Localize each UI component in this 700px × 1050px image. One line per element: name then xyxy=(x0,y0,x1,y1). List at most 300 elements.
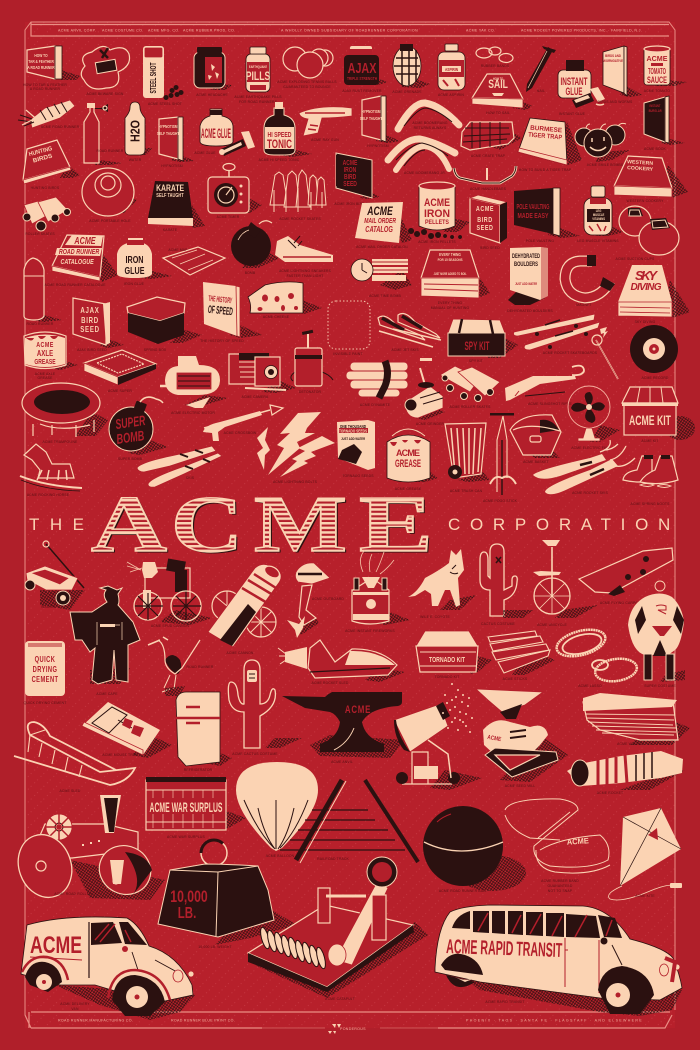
icon: iron bird seed dark book: ACME xyxy=(343,159,357,167)
icon: how to sail book xyxy=(472,74,532,115)
icon: skateboards: ACME ROCKET SKATEBOARDS xyxy=(543,351,598,355)
icon: mail order catalog: ACME xyxy=(366,206,394,218)
icon: jar xyxy=(194,47,232,97)
icon: H2O xyxy=(125,102,152,162)
icon: book how to tar and feather: HOW TO TAR & FEATHER xyxy=(23,83,67,87)
icon: iron bird seed dark book xyxy=(334,153,380,206)
icon: iron pellets can xyxy=(408,182,470,244)
icon: cactus xyxy=(480,544,533,626)
icon: tomato sauce can: ACME TOMATO xyxy=(644,89,670,93)
icon: ray gun xyxy=(299,107,352,142)
logo: Ponderous: PONDEROUS xyxy=(340,1027,366,1031)
icon: spy kit crate xyxy=(448,319,518,363)
icon: mouse trap xyxy=(82,702,172,758)
icon: spy kit crate: SPY KIT xyxy=(469,359,483,363)
icon: western cookery book xyxy=(614,156,688,203)
icon: sneakers xyxy=(275,236,333,278)
icon: ray gun: ACME RAY GUN xyxy=(311,138,339,142)
icon: basket tub: ACME BASKET xyxy=(523,460,549,464)
icon: one-thousand seeds box: ONE THOUSAND xyxy=(340,423,366,429)
icon: rocking horse xyxy=(20,444,82,497)
icon: fountain canister xyxy=(345,550,410,633)
footer text xyxy=(58,1018,642,1022)
icon: brush xyxy=(18,100,80,129)
icon: dehydrated boulders: JUST ADD WATER xyxy=(515,282,538,286)
icon: ribbon band: ACME RUBBER BAND xyxy=(541,879,579,883)
icon: ajax jar xyxy=(342,46,388,93)
icon: ajax jar: AJAX RUST REMOVER xyxy=(342,89,382,93)
icon: hypnotism book: SELF TAUGHT xyxy=(157,130,180,136)
title shadow: M xyxy=(256,482,349,570)
icon: nail xyxy=(526,46,556,93)
icon: tomato sauce can: ACME xyxy=(646,54,668,63)
icon: black ball xyxy=(423,806,526,893)
title word: ACME: A xyxy=(91,481,167,569)
header text: ACME ROCKET POWERED PRODUCTS, INC. · FAIRFIELD, N.J. xyxy=(521,28,642,32)
icon: axle grease xyxy=(24,332,78,380)
icon: book birds and...: BIRDS AND WORMS xyxy=(598,100,633,104)
icon: round bomb xyxy=(231,221,280,275)
icon: history of speed book: THE HISTORY xyxy=(208,294,233,305)
icon: railroad tracks: RAILROAD TRACK xyxy=(317,857,349,861)
icon: spring boots: ACME SPRING BOOTS xyxy=(630,502,670,506)
icon: dog sled: ACME SLED xyxy=(60,789,81,793)
icon: one-thousand seeds box: JUST ADD WATER xyxy=(341,437,366,441)
title word: ACME xyxy=(91,481,433,569)
icon: meat grinder xyxy=(405,358,445,426)
icon: cement bag: CEMENT xyxy=(32,676,59,684)
icon: lightning bolts: ACME LIGHTNING BOLTS xyxy=(273,480,318,484)
icon: boomerang 2: ACME BOOMERANG JR. xyxy=(404,171,446,175)
icon: electric motor xyxy=(160,356,228,415)
icon: road runner catalogue: CATALOGUE xyxy=(60,258,94,266)
icon: pole vaulting book: POLE VAULTING xyxy=(526,239,554,243)
icon: iron bird seed dark book: ACME IRON BIRD SEED xyxy=(334,202,376,206)
icon: tall tank: ROAD RUNNER xyxy=(27,322,54,326)
icon: rocket engine xyxy=(567,751,685,795)
footer text: ROAD RUNNER BLUE PRINT CO. xyxy=(171,1018,235,1022)
icon: wagon: WAGON xyxy=(41,605,55,609)
icon: one-thousand seeds box: TORNADO SEEDS xyxy=(339,428,367,434)
icon: iron bird seed dark book: IRON xyxy=(344,166,356,174)
icon: plunger detonator xyxy=(291,330,333,394)
icon: book how to tar and feather xyxy=(23,46,80,91)
icon: rope loops: ACME LASSO xyxy=(578,684,602,688)
icon: tornado kit crate: TORNADO KIT xyxy=(429,657,466,664)
icon: small rings xyxy=(476,47,513,68)
icon: super bomb xyxy=(109,397,168,461)
header text: ACME RUBBER PROD. CO. xyxy=(183,28,235,32)
icon: pogo stick: ACME POGO STICK xyxy=(483,499,518,503)
icon: aspirin bottle: ASPIRIN xyxy=(445,66,458,72)
icon: carpet: ACME FLYING CARPET xyxy=(600,601,640,605)
icon: sky diving book: DIVING xyxy=(630,282,662,293)
icon: skateboards xyxy=(514,314,600,355)
icon: small rings: RUBBER BANDS xyxy=(481,64,510,68)
icon: trash can: ACME TRASH CAN xyxy=(450,489,483,493)
icon: dynamite bundle xyxy=(346,361,408,407)
icon: pogo stick xyxy=(483,413,518,503)
title xyxy=(29,481,680,570)
icon: suction weights xyxy=(616,206,679,261)
icon: instant glue: INSTANT xyxy=(560,76,588,88)
icon: hunting birds book: HUNTING BIRDS xyxy=(31,186,60,190)
icon: book hypnotism 2: HYPNOTISM xyxy=(361,108,381,114)
icon: H2O: WATER xyxy=(129,158,142,162)
icon: refrigerator xyxy=(176,692,232,772)
icon: nail: NAIL xyxy=(537,89,545,93)
icon: karate book xyxy=(148,181,205,232)
icon: pole vaulting book xyxy=(514,188,580,243)
icon: skis pair xyxy=(137,446,222,487)
icon: rifle xyxy=(505,366,584,406)
icon: axle grease: GREASE xyxy=(37,376,53,380)
header text: ACME MFG. CO. xyxy=(148,28,180,32)
icon: rockets row xyxy=(270,170,326,221)
icon: railroad tracks xyxy=(280,780,418,863)
icon: earthquake pills: PILLS xyxy=(246,71,270,83)
icon: book how to tar and feather: A ROAD RUNNER xyxy=(27,64,55,70)
icon: trampoline: ACME TRAMPOLINE xyxy=(43,440,78,444)
icon: dark box xyxy=(127,297,202,352)
icon: seed mill: ACME SEED MILL xyxy=(505,784,535,788)
icon: burmese tiger trap book: HOW TO BUILD A TIGER TRAP xyxy=(519,168,572,172)
icon: axle grease: AXLE xyxy=(37,348,53,358)
icon: beware blob: ACME BEWARE SIGN xyxy=(87,92,124,96)
title shadow: A xyxy=(93,482,169,570)
icon: tennis balls xyxy=(277,47,337,89)
icon: logs bundle: ACME STICKS xyxy=(503,677,528,681)
icon: tall tank xyxy=(24,258,62,326)
icon: dynamite bundle: ACME DYNAMITE xyxy=(360,403,391,407)
icon: dehydrated boulders xyxy=(507,247,553,313)
icon: iron glue: IRON xyxy=(126,254,143,265)
icon: aspirin bottle xyxy=(438,44,465,97)
header text xyxy=(58,28,642,32)
icon: lightning bolts xyxy=(257,412,335,484)
icon: leg muscle vitamins: VITAMINS xyxy=(592,217,606,221)
icon: war surplus crate: ACME WAR SURPLUS xyxy=(167,835,206,839)
icon: ajax bird seed xyxy=(73,298,124,352)
icon: mail order catalog: CATALOG xyxy=(365,226,393,234)
icon: acme delivery van: ACME xyxy=(30,932,82,959)
icon: dehydrated boulders: DEHYDRATED xyxy=(512,253,540,260)
icon: acme grease can xyxy=(387,429,438,491)
icon: dark book: ACME BOOK xyxy=(644,147,667,151)
icon: kite xyxy=(608,808,682,900)
icon: cement bag: DRYING xyxy=(33,666,57,674)
icon: pole vaulting book: MADE EASY xyxy=(518,211,548,220)
icon: leg muscle vitamins: LEG MUSCLE VITAMINS xyxy=(577,239,619,243)
icon: cement bag xyxy=(24,641,66,705)
icon: superhero costume xyxy=(628,581,685,688)
icon: shoes skis: ACME JET SKIS xyxy=(391,348,419,352)
icon: acme delivery van: VAN xyxy=(71,1007,79,1011)
icon: rockets row: ACME ROCKET SKATES xyxy=(279,217,321,221)
icon: bird seed box: BIRD SEED xyxy=(480,246,500,250)
icon: outboard motor xyxy=(287,563,344,638)
icon: caped villain xyxy=(70,586,140,696)
icon: hi speed tonic: TONIC xyxy=(267,137,292,151)
icon: roller skates xyxy=(23,197,70,236)
icon: hypnotism book: HYPNOTISM xyxy=(161,164,183,168)
icon: one-thousand seeds box xyxy=(337,420,375,478)
icon: basket tub xyxy=(510,415,561,464)
icon: how to sail book: HOW TO SAIL xyxy=(486,111,510,115)
icon: earthquake pills xyxy=(234,47,282,104)
icon: jar: ACME HEADACHE xyxy=(196,93,228,97)
icon: vinyl record xyxy=(630,325,678,380)
icon: handlebar xyxy=(454,166,516,191)
icon: karate book: KARATE xyxy=(156,183,184,193)
header text: ACME ANVIL CORP. xyxy=(58,28,96,32)
icon: radio timer: ACME TIMER xyxy=(217,215,240,219)
artwork: upper catalogue xyxy=(18,44,695,506)
icon: spy kit crate: SPY KIT xyxy=(464,339,490,353)
icon: sky diving book: SKY DIVING xyxy=(635,320,656,324)
icon: kite: ACME KITE xyxy=(635,894,655,898)
icon: acme delivery van xyxy=(21,917,195,1020)
icon: burmese tiger trap book xyxy=(518,118,582,172)
icon: camera: ACME CAMERA xyxy=(242,395,269,399)
icon: rifle: ACME SLINGSHOT RIFLE xyxy=(528,402,572,406)
icon: tomato sauce can: TOMATO xyxy=(648,67,666,76)
icon: dotted invisible box: INVISIBLE PAINT xyxy=(333,352,363,356)
icon: 10,000 lb weight: 10,000 xyxy=(170,888,208,907)
icon: ajax jar: TRIPLE STRENGTH xyxy=(347,75,377,81)
icon: leg muscle vitamins: LEG xyxy=(596,209,602,213)
icon: ajax bird seed: AJAX xyxy=(80,305,100,315)
icon: acme delivery van: ACME DELIVERY xyxy=(60,1002,90,1006)
icon: cheese xyxy=(248,282,322,319)
icon: western cookery book: WESTERN COOKERY xyxy=(626,199,664,203)
icon: catapult xyxy=(248,857,428,1001)
icon: dark box: SPRING BOX xyxy=(144,348,167,352)
icon: alarm clock and dynamite: ACME TIME BOMB xyxy=(369,294,401,298)
icon: war surplus crate: ACME WAR SURPLUS xyxy=(150,799,222,815)
icon: rocket boat xyxy=(278,640,405,685)
icon: book birds and...: WORMGATIVE xyxy=(603,59,624,63)
icon: dehydrated boulders: DEHYDRATED BOULDERS xyxy=(507,309,553,313)
icon: book hypnotism 2 xyxy=(360,96,400,148)
icon: cement bag: QUICK xyxy=(35,656,55,664)
icon: everything book xyxy=(421,250,490,310)
icon: burmese tiger trap book: BURMESE xyxy=(530,125,563,134)
icon: dog sled xyxy=(14,722,135,793)
icon: ribbon band: NOT TO SNAP xyxy=(548,889,573,893)
icon: unicycle: ACME UNICYCLE xyxy=(537,623,567,627)
icon: earthquake pills: EARTHQUAKE xyxy=(249,65,267,69)
title word: THE: THE xyxy=(29,515,94,534)
icon: book birds and...: BIRDS AND xyxy=(605,54,621,58)
icon: glue tube xyxy=(572,87,605,108)
icon: H2O: H2O xyxy=(128,120,142,142)
icon: instant glue xyxy=(558,60,591,116)
icon: hi speed tonic: HI SPEED xyxy=(268,132,292,139)
footer text: PHOENIX · TAOS · SANTA FE · FLAGSTAFF · AND ELSEWHERE xyxy=(466,1018,642,1022)
icon: sky diving book: SKY xyxy=(635,268,658,283)
icon: fan xyxy=(568,386,620,450)
icon: grenade: ACME GRENADE xyxy=(392,90,422,94)
icon: acme kit: ACME KIT xyxy=(641,439,659,443)
icon: hunting birds book: BIRDS xyxy=(32,154,53,165)
icon: anvil: ACME xyxy=(345,704,371,716)
icon: dark book: INSTANT xyxy=(650,104,661,108)
icon: trampoline xyxy=(22,383,108,444)
icon: road runner catalogue: ACME xyxy=(74,235,97,246)
icon: book how to tar and feather: TAR & FEATHER xyxy=(28,58,54,64)
title shadow xyxy=(93,482,435,570)
icon: iron pellets can: ACME IRON PELLETS xyxy=(418,240,456,244)
icon: hypnotism book: HYPNOTISM xyxy=(158,123,178,129)
icon: flat book xyxy=(84,350,156,393)
icon: road runner catalogue: ROAD RUNNER xyxy=(59,248,99,256)
icon: road runner catalogue xyxy=(44,235,118,287)
icon: grenade xyxy=(392,44,430,94)
icon: burmese tiger trap book: TIGER TRAP xyxy=(528,132,563,142)
icon: acme grease can: ACME GREASE xyxy=(395,487,422,491)
icon: iron pellets can: ACME xyxy=(424,197,450,209)
icon: unicycle xyxy=(533,540,598,627)
icon: flat book: ACME SUPER xyxy=(108,389,132,393)
icon: rocket skis xyxy=(533,440,635,495)
icon: history of speed book xyxy=(200,282,262,343)
icon: iron pellets can: IRON xyxy=(424,208,450,220)
icon: roadrunner bird xyxy=(148,637,214,696)
icon: sky diving book xyxy=(618,265,690,324)
icon: tornado kit crate xyxy=(416,631,492,679)
icon: wolf: WILE E. COYOTE xyxy=(420,615,450,619)
icon: striped cannon xyxy=(208,564,281,655)
header text: A WHOLLY OWNED SUBSIDIARY OF ROADRUNNER CORPORATION xyxy=(281,28,418,32)
icon: round bomb: BOMB xyxy=(245,271,256,275)
icon: alarm clock and dynamite xyxy=(351,259,412,298)
icon: super bomb: BOMB xyxy=(115,427,145,447)
icon: dark book xyxy=(644,96,685,151)
icon: ajax bird seed: SEED xyxy=(80,324,100,334)
icon: brush: ACME ROAD RUNNER xyxy=(41,125,80,129)
icon: tennis balls: GUARANTEED TO BOUNCE xyxy=(283,85,331,89)
icon: war surplus crate xyxy=(146,777,246,839)
icon: plunger detonator: DETONATOR xyxy=(299,390,322,394)
icon: iron glue: GLUE xyxy=(125,265,145,276)
icon: aspirin bottle: ACME ASPIRIN xyxy=(438,93,464,97)
icon: history of speed book: OF SPEED xyxy=(207,304,233,318)
icon: leg muscle vitamins xyxy=(577,186,624,243)
icon: tennis balls: ACME EXPLODING TENNIS BALLS xyxy=(277,80,337,84)
icon: everything book: EVERY THING xyxy=(439,251,461,257)
icon: outboard motor: ACME OUTBOARD xyxy=(312,597,344,601)
icon: steel shot can xyxy=(143,46,184,106)
icon: mouse trap: ACME MOUSE TRAP xyxy=(102,753,138,757)
icon: dehydrated boulders: BOULDERS xyxy=(514,261,538,268)
icon: hi speed tonic: ACME HI SPEED TONIC xyxy=(259,158,300,162)
icon: everything book: FOR 15 SEASONS xyxy=(438,258,463,262)
header text: ACME COSTUME CO. xyxy=(102,28,144,32)
icon: 10,000 lb weight: 10,000 LB. WEIGHT xyxy=(198,945,232,949)
icon: super bomb: SUPER BOMB xyxy=(118,457,143,461)
icon: ajax bird seed: AJAX BIRD SEED xyxy=(77,348,107,352)
icon: western cookery book: WESTERN xyxy=(627,159,654,167)
icon: snow cannon xyxy=(394,683,482,790)
icon: seed mill xyxy=(476,689,568,788)
icon: ribbon band xyxy=(505,799,610,893)
icon: electric motor: ACME ELECTRIC MOTOR xyxy=(171,411,215,415)
icon: wolf xyxy=(408,549,476,619)
icon: map: ACME MAP xyxy=(168,248,188,252)
icon: history of speed book: THE HISTORY OF SPEED xyxy=(200,339,244,343)
icon: trap crate xyxy=(461,122,522,158)
icon: instant glue: INSTANT GLUE xyxy=(559,112,586,116)
icon: four skates xyxy=(440,366,500,409)
icon: vinyl record: ACME RECORD xyxy=(641,376,669,380)
icon: karate book: SELF TAUGHT xyxy=(156,192,184,199)
title word: ACME: M xyxy=(254,481,347,569)
icon: cactus: CACTUS COSTUME xyxy=(481,622,516,626)
icon: rocket boat: ACME ROCKET SLED xyxy=(311,681,349,685)
icon: meat grinder: ACME GRINDER xyxy=(416,422,444,426)
icon: road runner catalogue: ACME ROAD RUNNER CATALOGUE xyxy=(44,283,106,287)
artwork: upper catalogue: ACME GLUE xyxy=(201,125,231,141)
icon: crossbow arrow xyxy=(203,405,283,441)
icon: ajax jar: AJAX xyxy=(348,59,377,76)
icon: paper stack xyxy=(583,693,690,746)
icon: boomerang 1: ACME BOOMERANG xyxy=(412,121,448,125)
icon: hi speed tonic xyxy=(259,102,312,162)
icon: balloon xyxy=(236,762,318,858)
icon: hypnotism book xyxy=(157,117,195,168)
icon: anvil: ACME ANVIL xyxy=(331,760,353,764)
icon: everything book: MANUAL OF HUNTING xyxy=(431,306,470,310)
icon: bird seed box: ACME xyxy=(476,205,494,213)
icon: earthquake pills: FOR ROAD RUNNERS xyxy=(239,100,278,104)
icon: black ball: ACME ROAD RUNNER BALL xyxy=(439,889,487,893)
icon: steam cart xyxy=(127,559,212,628)
icon: everything book: EVERY THING xyxy=(438,301,462,305)
icon: iron bird seed dark book: BIRD xyxy=(344,173,357,181)
icon: large cactus xyxy=(228,660,302,756)
icon: book hypnotism 2: SELF TAUGHT xyxy=(360,115,383,121)
icon: fan: ACME ELECTRIC FAN xyxy=(571,446,609,450)
icon: mail order catalog: MAIL ORDER xyxy=(364,217,396,225)
icon: dotted invisible box xyxy=(328,301,370,356)
icon: bird seed box: BIRD xyxy=(477,216,493,224)
icon: trash can xyxy=(445,423,490,493)
icon: axle grease: ACME AXLE xyxy=(35,372,56,376)
icon: handlebar: ACME HANDLEBARS xyxy=(470,187,507,191)
icon: smiling bombs xyxy=(575,123,630,167)
icon: ajax bird seed: BIRD xyxy=(81,315,99,325)
icon: skis pair: SKIS xyxy=(186,476,195,480)
icon: steam cart: ACME SPUD CANNON xyxy=(151,624,189,628)
icon: boomerang 2 xyxy=(388,139,455,175)
icon: camera xyxy=(229,353,296,399)
icon: karate book: KARATE xyxy=(163,228,178,232)
icon: acme rapid transit bus: ACME RAPID TRANSIT xyxy=(485,1000,525,1004)
icon: acme rapid transit bus: ACME RAPID TRANSIT xyxy=(446,936,563,962)
icon: boomerang 1: RETURNS ALWAYS xyxy=(414,126,447,130)
icon: sneakers: ACME LIGHTNING SNEAKERS xyxy=(279,269,332,273)
icon: iron pellets can: PELLETS xyxy=(425,220,449,226)
icon: rope loops xyxy=(554,625,638,688)
icon: book how to tar and feather: HOW TO xyxy=(34,52,48,58)
icon: suction weights: ACME SUCTION CUPS xyxy=(616,257,655,261)
icon: cement bag: QUICK DRYING CEMENT xyxy=(24,701,66,705)
title shadow: C xyxy=(173,482,245,570)
icon: 10,000 lb weight xyxy=(158,840,297,949)
icon: iron glue xyxy=(117,238,172,286)
icon: acme rapid transit bus xyxy=(435,905,682,1016)
